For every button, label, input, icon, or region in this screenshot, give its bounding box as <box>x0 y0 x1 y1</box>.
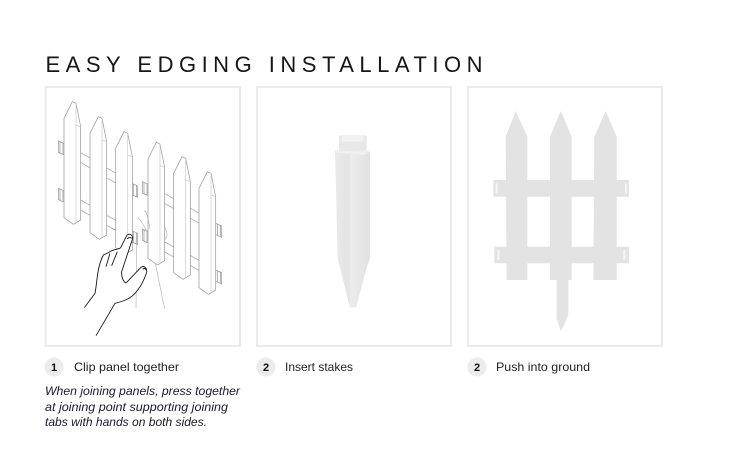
step 3 label <box>468 358 590 376</box>
illustration: fence panels with hand <box>58 102 222 336</box>
step 1 note: tabs with hands on both sides. <box>45 415 207 429</box>
step 2 label: 2 <box>263 362 269 374</box>
illustration: fence panel with stake <box>493 111 629 332</box>
panel: clip panel together <box>46 87 240 346</box>
step 1 note: at joining point supporting joining <box>45 400 228 414</box>
step 3 label: 2 <box>474 362 480 374</box>
illustration: stake <box>335 135 370 308</box>
step 1 note: When joining panels, press together <box>45 384 241 398</box>
step 3 label: Push into ground <box>496 360 590 374</box>
step 2 label: Insert stakes <box>285 360 353 374</box>
step 1 label: Clip panel together <box>74 360 179 374</box>
panel: push into ground <box>468 87 662 346</box>
step 1 label: 1 <box>51 362 57 374</box>
step 1 note <box>45 384 241 429</box>
panel: insert stakes <box>257 87 451 346</box>
step 1 label <box>44 358 179 376</box>
step 2 label <box>256 358 353 376</box>
title: EASY EDGING INSTALLATION <box>46 52 482 77</box>
